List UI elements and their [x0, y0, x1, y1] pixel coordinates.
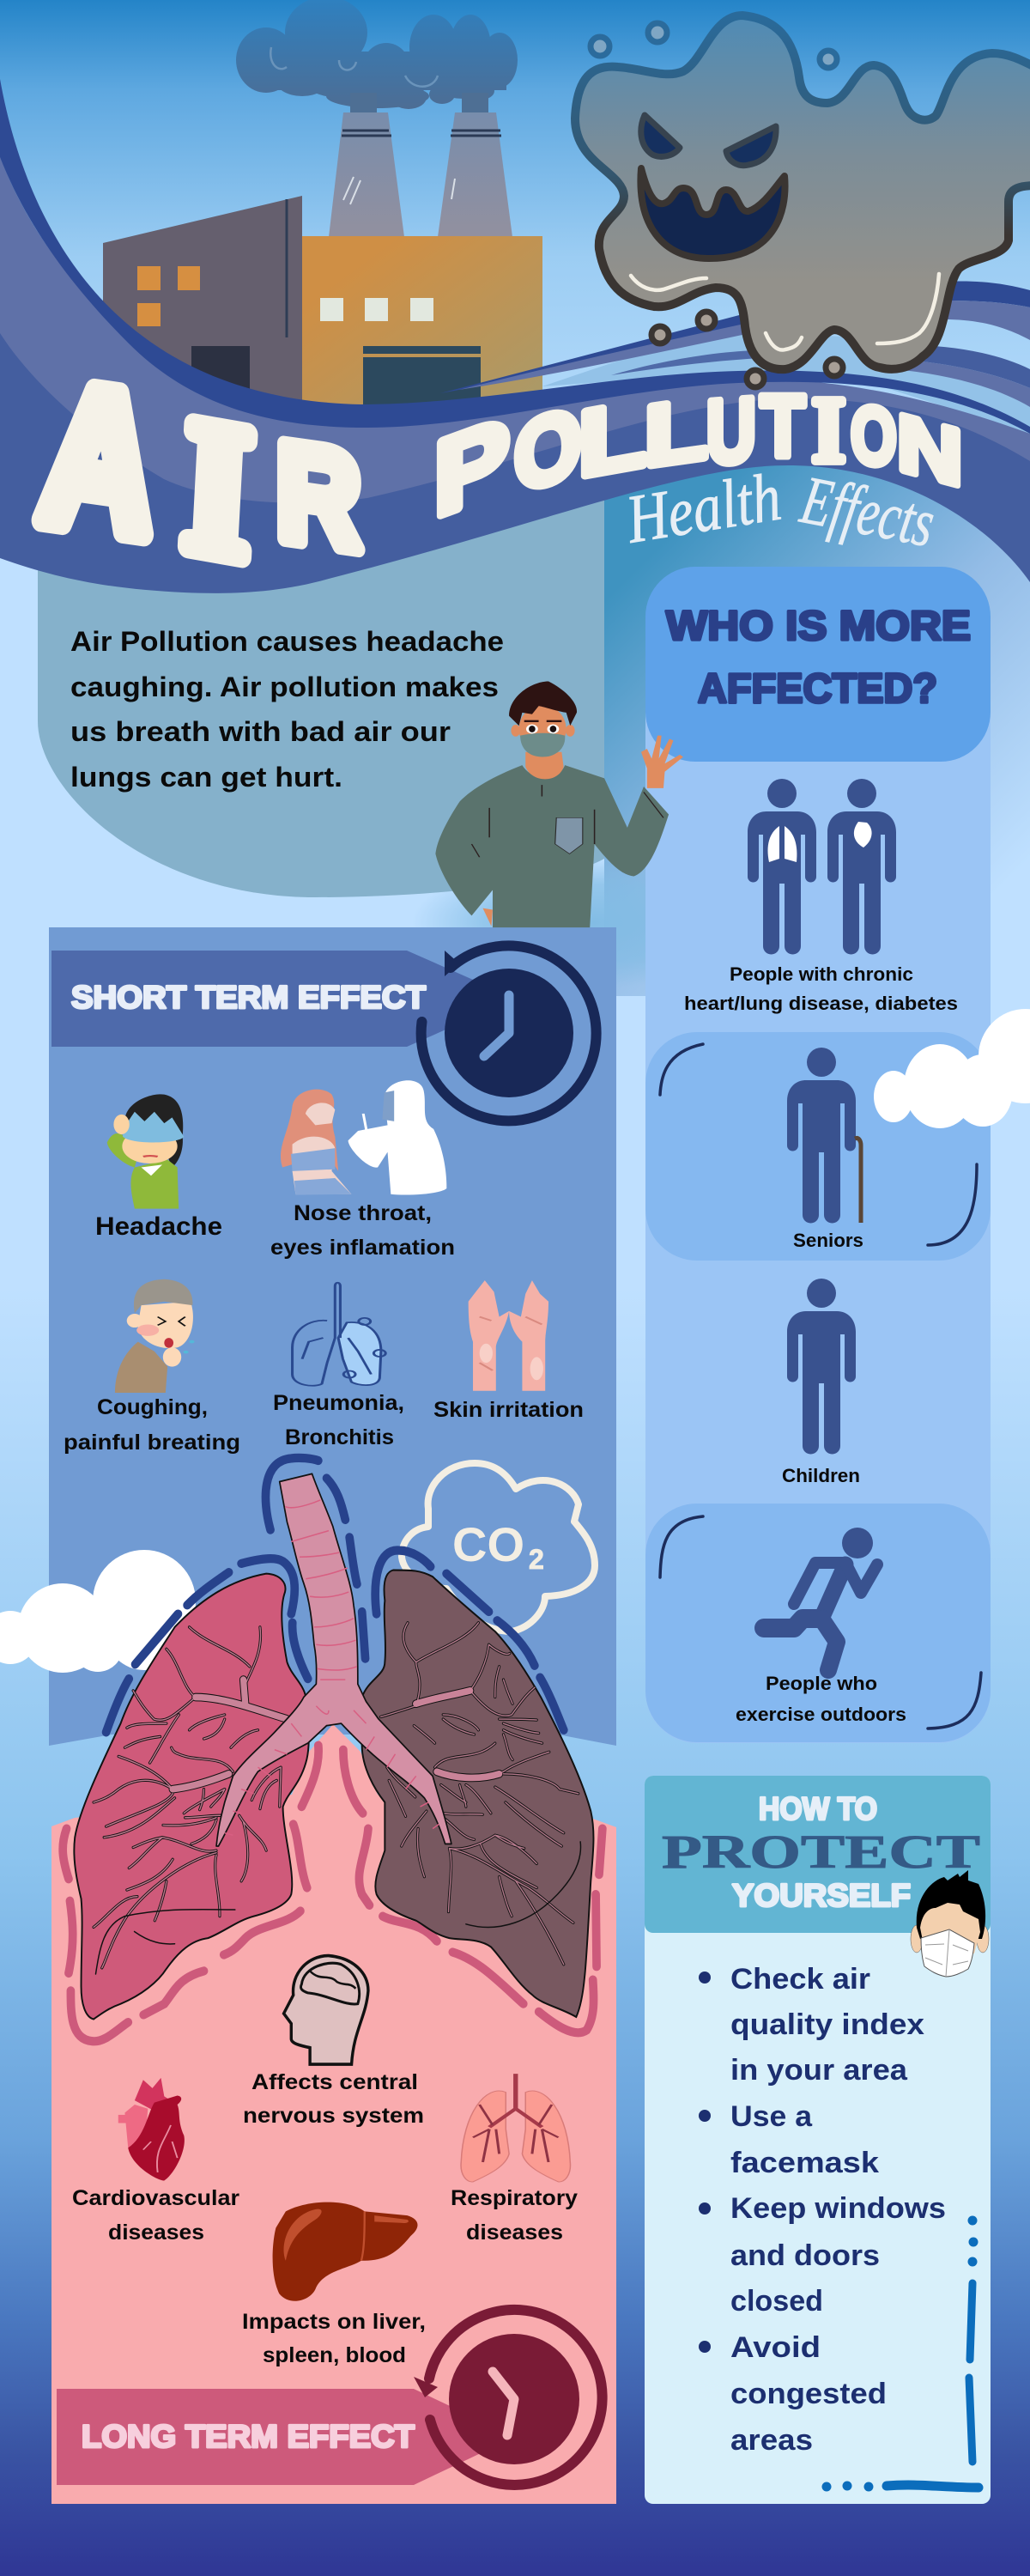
icon: clock short term	[421, 945, 597, 1121]
heading box: YOURSELF	[732, 1878, 911, 1913]
text: intro paragraph	[70, 626, 504, 793]
monster highlights	[631, 274, 939, 350]
symptom: nose throat eyes: Nose throat,	[294, 1201, 432, 1225]
symptom: coughing: Coughing,	[97, 1395, 208, 1419]
block: seniors	[645, 1032, 991, 1261]
symptom: headache: Headache	[95, 1212, 222, 1241]
symptom: skin irritation: Skin irritation	[433, 1398, 584, 1422]
title: Air Pollution: I	[812, 378, 845, 482]
subtitle: Health Effects: Health	[621, 459, 786, 558]
icon: clock long term	[414, 2310, 603, 2485]
monster eyes	[641, 115, 776, 166]
factory	[103, 196, 542, 417]
panel: long term effect	[52, 1724, 616, 2504]
icon: medic swabbing patient	[281, 1080, 446, 1195]
heading box: HOW TO	[759, 1791, 877, 1826]
decorative dots and lines	[822, 2215, 978, 2492]
text: intro paragraph: Air Pollution causes headache	[70, 626, 504, 657]
icon: small lungs	[461, 2074, 570, 2182]
symptom: pneumonia: Pneumonia,	[273, 1391, 404, 1415]
block: chronic disease people: People with chronic	[730, 963, 913, 985]
effect: liver: spleen, blood	[263, 2343, 406, 2367]
right gradient backdrop	[412, 455, 1030, 996]
icon: CO2 cloud	[402, 1463, 595, 1631]
effect: cardiovascular: diseases	[108, 2221, 204, 2245]
airway branches	[94, 1623, 581, 1974]
title: Air Pollution: T	[760, 378, 805, 475]
bullet list: quality index	[730, 2008, 924, 2041]
panel: how to protect yourself	[645, 1776, 991, 2504]
icon: man wearing facemask	[911, 1870, 989, 1977]
heading box: PROTECT	[662, 1826, 980, 1878]
subtitle: Health Effects	[621, 459, 941, 562]
block: outdoor exercise	[645, 1504, 991, 1742]
panel: intro backdrop	[38, 455, 604, 897]
icon: smoke cloud	[236, 0, 518, 109]
text: nervous system: nervous system	[243, 2104, 424, 2128]
icon: CO2 cloud: CO	[452, 1517, 524, 1571]
title: Air Pollution	[33, 342, 963, 598]
icon: white lungs	[767, 826, 797, 862]
icon: woman with headache	[107, 1094, 184, 1209]
symptom: headache	[95, 1094, 222, 1241]
subtitle: Health Effects: Effects	[795, 462, 941, 562]
heading box	[645, 1776, 991, 1933]
heading box: who is more affected: AFFECTED?	[698, 666, 937, 712]
cloud: left	[0, 1550, 196, 1673]
text: nervous system: Affects central	[251, 2070, 418, 2094]
left lung	[74, 1574, 309, 2020]
bullet list: areas	[730, 2424, 813, 2457]
symptom: skin irritation	[433, 1280, 584, 1422]
trachea and bronchi	[216, 1473, 451, 1846]
block: children	[782, 1279, 860, 1486]
person with mask	[435, 682, 683, 927]
chimneys	[329, 93, 512, 237]
cloud: right	[874, 1009, 1030, 1128]
text: intro paragraph: lungs can get hurt.	[70, 762, 342, 793]
icon: head with brain	[284, 1956, 368, 2064]
symptom: coughing	[64, 1279, 240, 1455]
text: intro paragraph: us breath with bad air our	[70, 716, 451, 747]
effect: cardiovascular: Cardiovascular	[72, 2186, 239, 2210]
bubbles	[591, 23, 843, 387]
symptom: nose throat eyes: eyes inflamation	[270, 1236, 455, 1260]
effect: respiratory: Respiratory	[451, 2186, 578, 2210]
symptom: pneumonia	[273, 1283, 404, 1449]
heading: long term effect: LONG TERM EFFECT	[82, 2419, 415, 2454]
bullet list: congested	[730, 2378, 887, 2410]
effect: respiratory	[451, 2074, 578, 2245]
block: outdoor exercise: exercise outdoors	[736, 1704, 906, 1725]
icon: cane	[855, 1138, 861, 1223]
block: outdoor exercise: People who	[766, 1673, 877, 1694]
title: Air Pollution: U	[706, 378, 756, 483]
icon: coughing man	[115, 1279, 195, 1393]
title: Air Pollution: L	[645, 380, 707, 485]
heading box: who is more affected: WHO IS MORE	[666, 604, 971, 649]
wave banner	[0, 79, 1030, 593]
bullet list: Avoid	[730, 2331, 821, 2364]
icon: runner	[764, 1528, 877, 1670]
pink dashes	[63, 1746, 603, 2041]
bullet list: and doors	[730, 2239, 880, 2272]
title: Air Pollution: L	[579, 381, 646, 496]
icon: angry pollution cloud	[575, 15, 1030, 387]
icon: heart	[118, 2078, 185, 2180]
icon: white heart	[854, 822, 872, 848]
block: seniors: Seniors	[793, 1230, 863, 1251]
bullet list: Use a	[730, 2100, 813, 2133]
right wave stripes	[440, 281, 1030, 434]
text: nervous system	[243, 2070, 424, 2128]
effect: liver	[242, 2202, 426, 2367]
effect: respiratory: diseases	[466, 2221, 563, 2245]
heading: short term effect: SHORT TERM EFFECT	[71, 980, 426, 1015]
bullet list: Check air	[730, 1963, 870, 1996]
heading: short term effect	[52, 951, 516, 1047]
bullet list: in your area	[730, 2054, 908, 2087]
symptom: nose throat eyes	[270, 1080, 455, 1260]
heading box: who is more affected	[645, 567, 991, 762]
effect: cardiovascular	[72, 2078, 239, 2245]
icon: liver	[273, 2202, 417, 2301]
icon: irritated hands	[469, 1280, 548, 1391]
panel: who is more affected	[645, 644, 991, 1743]
effect: liver: Impacts on liver,	[242, 2310, 426, 2334]
title: Air Pollution: P	[434, 394, 509, 539]
monster mouth	[640, 168, 785, 258]
symptom: pneumonia: Bronchitis	[285, 1425, 394, 1449]
title: Air Pollution: R	[276, 413, 360, 579]
symptom: coughing: painful breating	[64, 1431, 240, 1455]
title: Air Pollution: O	[514, 386, 582, 513]
icon: CO2 cloud: 2	[529, 1544, 544, 1575]
bullet list: closed	[730, 2285, 823, 2318]
right lung	[361, 1571, 593, 2017]
block: children: Children	[782, 1465, 860, 1486]
title: Air Pollution: I	[179, 380, 256, 598]
bullet list: facemask	[730, 2147, 879, 2179]
heading: long term effect	[57, 2389, 515, 2485]
bullet list	[699, 1963, 946, 2457]
blue dashes	[106, 1458, 564, 1732]
airway ring marks	[225, 1500, 439, 1835]
panel: short term effect	[49, 927, 616, 1746]
title: Air Pollution: N	[897, 397, 963, 504]
block: chronic disease people: heart/lung disease, diabetes	[684, 993, 958, 1014]
title: Air Pollution: O	[851, 388, 897, 483]
text: intro paragraph: caughing. Air pollution makes	[70, 671, 499, 702]
title: Air Pollution: A	[33, 342, 167, 577]
lungs illustration	[63, 1458, 603, 2064]
bullet list: Keep windows	[730, 2192, 946, 2225]
block: chronic disease people	[684, 779, 958, 1014]
icon: outlined lungs	[293, 1283, 385, 1386]
